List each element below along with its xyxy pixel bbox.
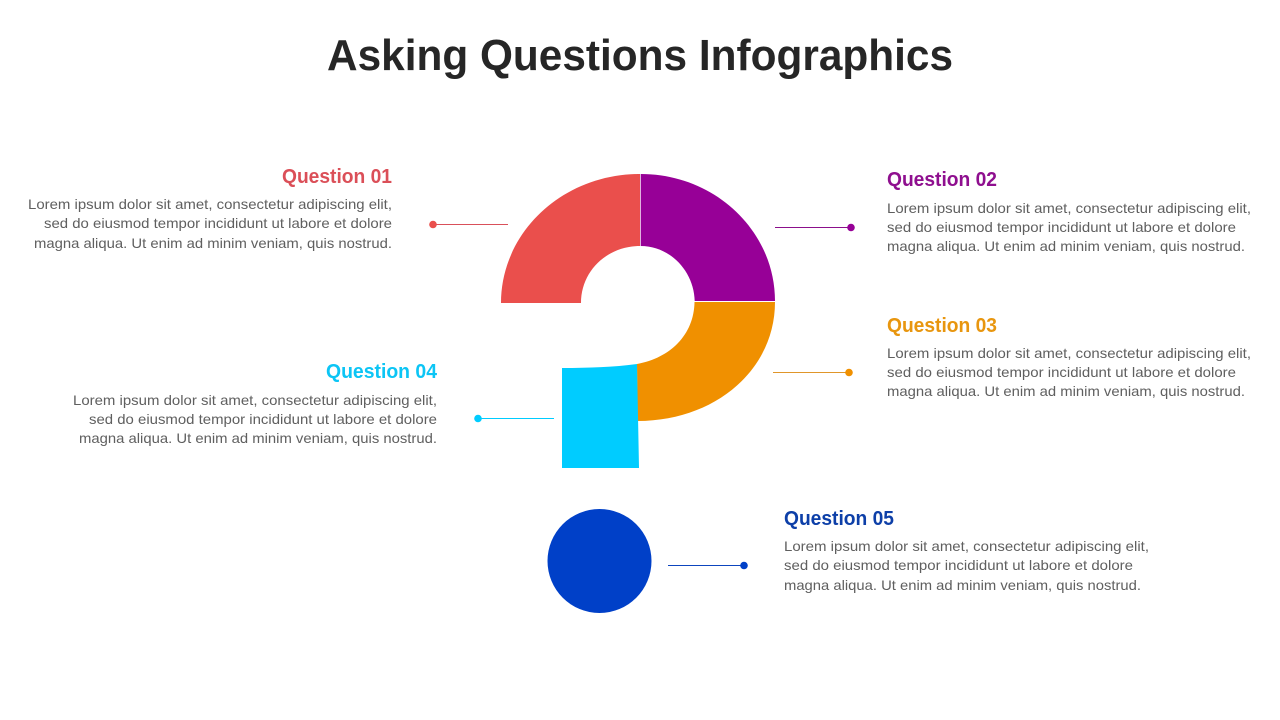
text block: question 03 <box>887 315 1251 399</box>
text block: question 02 <box>887 169 1251 254</box>
text block: question 02: magna aliqua. Ut enim ad minim veniam, quis nostrud. <box>887 238 1245 254</box>
text block: question 05: Lorem ipsum dolor sit amet, consectetur adipiscing elit, <box>784 538 1149 554</box>
heading: question 04: Question 04 <box>326 361 438 383</box>
segment: purple arc <box>641 174 775 301</box>
text block: question 05: magna aliqua. Ut enim ad minim veniam, quis nostrud. <box>784 577 1141 593</box>
segment: red arc <box>501 174 640 303</box>
text block: question 02: sed do eiusmod tempor incididunt ut labore et dolore <box>887 219 1236 235</box>
connector: question 02 <box>775 224 855 231</box>
text block: question 01: sed do eiusmod tempor incididunt ut labore et dolore <box>44 215 392 231</box>
text block: question 04 <box>73 361 438 446</box>
text block: question 01: magna aliqua. Ut enim ad minim veniam, quis nostrud. <box>34 235 392 251</box>
text block: question 05 <box>784 508 1149 593</box>
connector: question 03 <box>773 369 853 376</box>
segment: cyan stem <box>562 364 639 468</box>
heading: question 05: Question 05 <box>784 508 894 530</box>
heading: question 02: Question 02 <box>887 169 997 191</box>
text block: question 04: magna aliqua. Ut enim ad minim veniam, quis nostrud. <box>79 430 437 446</box>
text block: question 03: magna aliqua. Ut enim ad minim veniam, quis nostrud. <box>887 383 1245 399</box>
heading: question 01: Question 01 <box>282 166 392 188</box>
connector: question 01 <box>429 221 508 228</box>
segment: orange arc <box>637 302 775 421</box>
text block: question 02: Lorem ipsum dolor sit amet, consectetur adipiscing elit, <box>887 200 1251 216</box>
text block: question 04: Lorem ipsum dolor sit amet, consectetur adipiscing elit, <box>73 392 437 408</box>
text block: question 03: Lorem ipsum dolor sit amet, consectetur adipiscing elit, <box>887 345 1251 361</box>
title: Asking Questions Infographics <box>327 31 953 80</box>
segment: blue dot <box>548 509 652 613</box>
text block: question 01 <box>28 166 392 251</box>
text block: question 03: sed do eiusmod tempor incididunt ut labore et dolore <box>887 364 1236 380</box>
text block: question 05: sed do eiusmod tempor incididunt ut labore et dolore <box>784 557 1133 573</box>
question mark graphic <box>501 174 775 613</box>
text block: question 04: sed do eiusmod tempor incididunt ut labore et dolore <box>89 411 437 427</box>
connector: question 04 <box>474 415 554 422</box>
heading: question 03: Question 03 <box>887 315 997 337</box>
connector: question 05 <box>668 562 748 569</box>
text block: question 01: Lorem ipsum dolor sit amet, consectetur adipiscing elit, <box>28 196 392 212</box>
